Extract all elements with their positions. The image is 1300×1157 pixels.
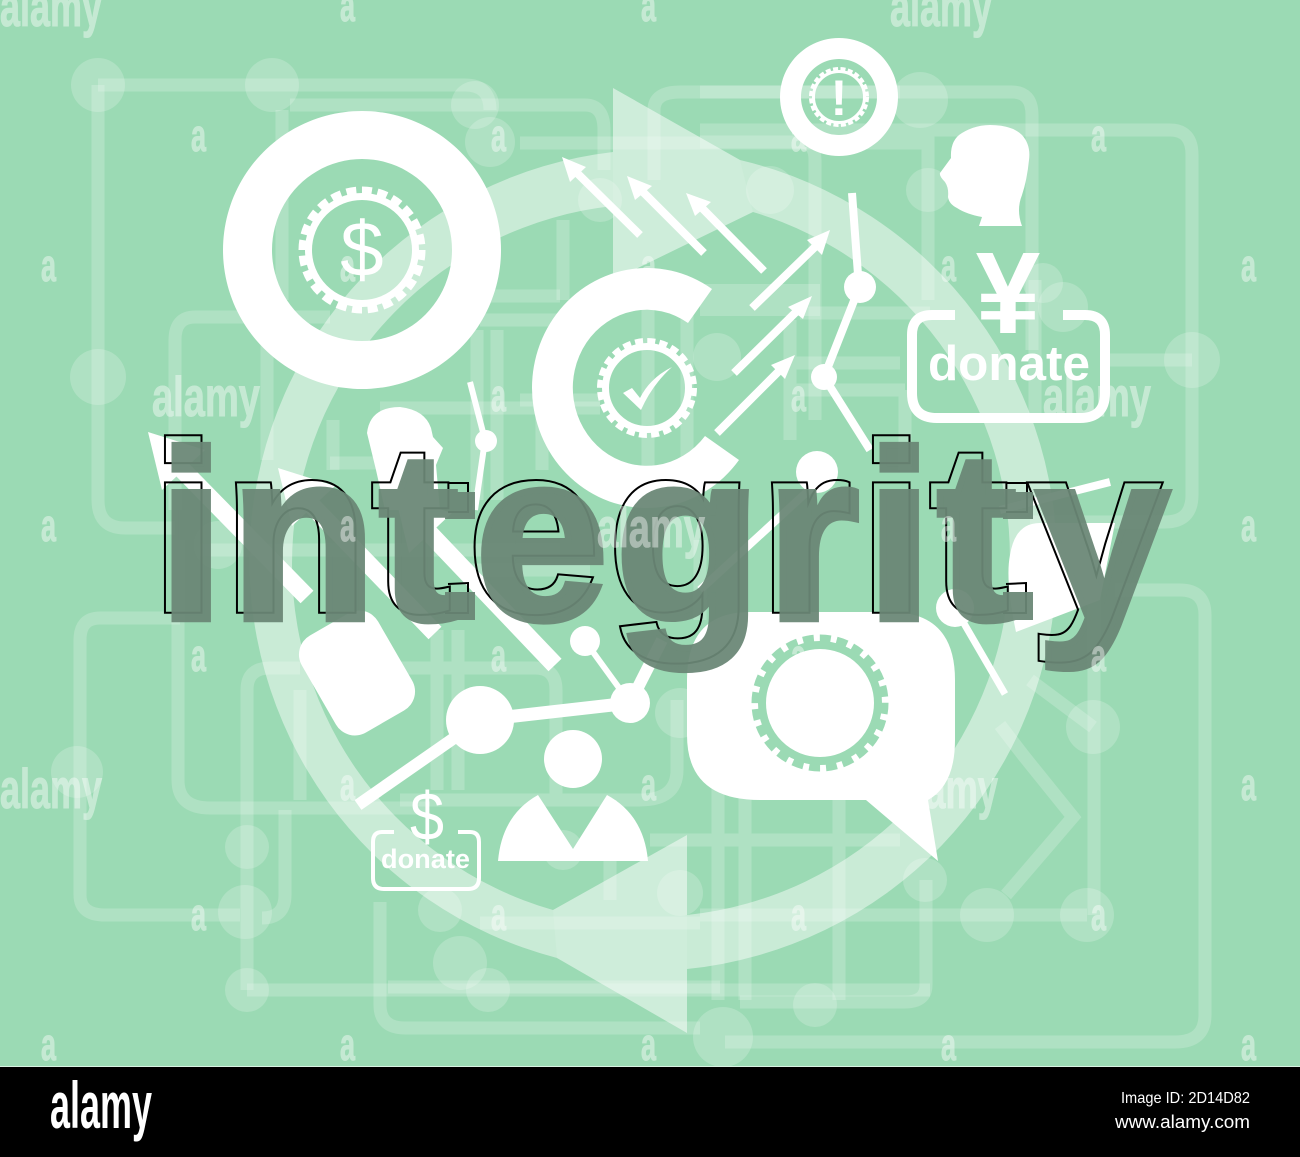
icon: ring with exclamation gear [780, 38, 898, 156]
footer url: www.alamy.com [1114, 1112, 1250, 1132]
icon: yen donate box: ¥ [976, 228, 1040, 358]
footer logo: alamy [50, 1068, 152, 1142]
icon: head profile right [940, 125, 1029, 226]
icon: large ring with dollar gear [223, 111, 501, 389]
title fill: integrity [158, 402, 1169, 670]
watermark: small a marks: a [191, 630, 207, 681]
icon: ring with exclamation gear: ! [831, 70, 847, 126]
cycle arrows [250, 88, 1057, 1033]
chart: bottom line with nodes [358, 626, 662, 805]
icon: large ring with dollar gear: $ [340, 205, 384, 293]
circuit network background [51, 58, 1220, 1067]
icon: shape behind letter y [1008, 523, 1115, 632]
watermark: small a marks: a [41, 240, 57, 291]
watermark: large alamy marks: alamy [895, 757, 998, 820]
icon: arrows pointing up left [562, 157, 764, 271]
icon: speech bubble with gear [687, 612, 955, 861]
watermark: small a marks: a [191, 110, 207, 161]
watermark: small a marks: a [1091, 110, 1107, 161]
icon: yen donate box: donate [928, 337, 1090, 391]
watermark: small a marks: a [641, 1019, 657, 1070]
watermark: small a marks: a [340, 759, 356, 810]
watermark: small a marks: a [340, 240, 356, 291]
icon: yen donate box [912, 228, 1105, 418]
chart: top right line with nodes [700, 193, 1110, 590]
watermark: small a marks: a [340, 500, 356, 551]
watermark: small a marks: a [41, 500, 57, 551]
watermark: large alamy marks: alamy [152, 365, 260, 428]
watermark: small a marks: a [941, 500, 957, 551]
icon: diagonal arrows behind title [148, 432, 555, 665]
title outline: integrity [150, 394, 1161, 662]
watermark: small a marks: a [340, 1019, 356, 1070]
watermark: small a marks: a [41, 1019, 57, 1070]
watermark: large alamy marks: alamy [0, 757, 102, 820]
icon: dollar donate box [373, 779, 479, 889]
watermark: small a marks: a [1241, 500, 1257, 551]
watermark: small a marks: a [791, 110, 807, 161]
watermark: small a marks: a [791, 630, 807, 681]
watermark: small a marks: a [191, 889, 207, 940]
icon: rounded square [291, 603, 423, 743]
watermark: small a marks: a [491, 110, 507, 161]
arrow head highlights [553, 88, 753, 1033]
watermark: small a marks: a [791, 370, 807, 421]
icon: dollar donate box: $ [410, 779, 444, 855]
watermark: small a marks: a [1091, 889, 1107, 940]
watermark: large alamy marks: alamy [1043, 365, 1151, 428]
chart: right line with node [936, 589, 1005, 694]
footer image id: Image ID: 2D14D82 [1121, 1090, 1250, 1107]
watermark: small a marks: a [1241, 240, 1257, 291]
watermark: small a marks: a [491, 630, 507, 681]
icon: partial ring with check gear [532, 268, 739, 508]
watermark: large alamy marks [0, 0, 1151, 820]
white icon layer [148, 38, 1115, 889]
watermark: small a marks: a [941, 1019, 957, 1070]
icon: head profile behind title [367, 407, 443, 510]
icon: dollar donate box: donate [381, 844, 470, 874]
watermark: small a marks: a [1091, 630, 1107, 681]
watermark: small a marks: a [1241, 759, 1257, 810]
watermark: large alamy marks: alamy [597, 496, 705, 559]
watermark: small a marks: a [1241, 1019, 1257, 1070]
icon: arrows pointing up right [717, 230, 830, 433]
watermark: small a marks: a [941, 240, 957, 291]
watermark: small a marks: a [641, 240, 657, 291]
arrow ring with two heads [250, 88, 1057, 1033]
watermark: small a marks: a [791, 889, 807, 940]
watermark: small a marks: a [491, 370, 507, 421]
footer bar [0, 1066, 1300, 1157]
icon: person [498, 730, 648, 861]
chart: small line behind title [470, 382, 497, 510]
title: integrity [164, 434, 1173, 674]
watermark: small a marks: a [491, 889, 507, 940]
watermark: small a marks: a [641, 759, 657, 810]
